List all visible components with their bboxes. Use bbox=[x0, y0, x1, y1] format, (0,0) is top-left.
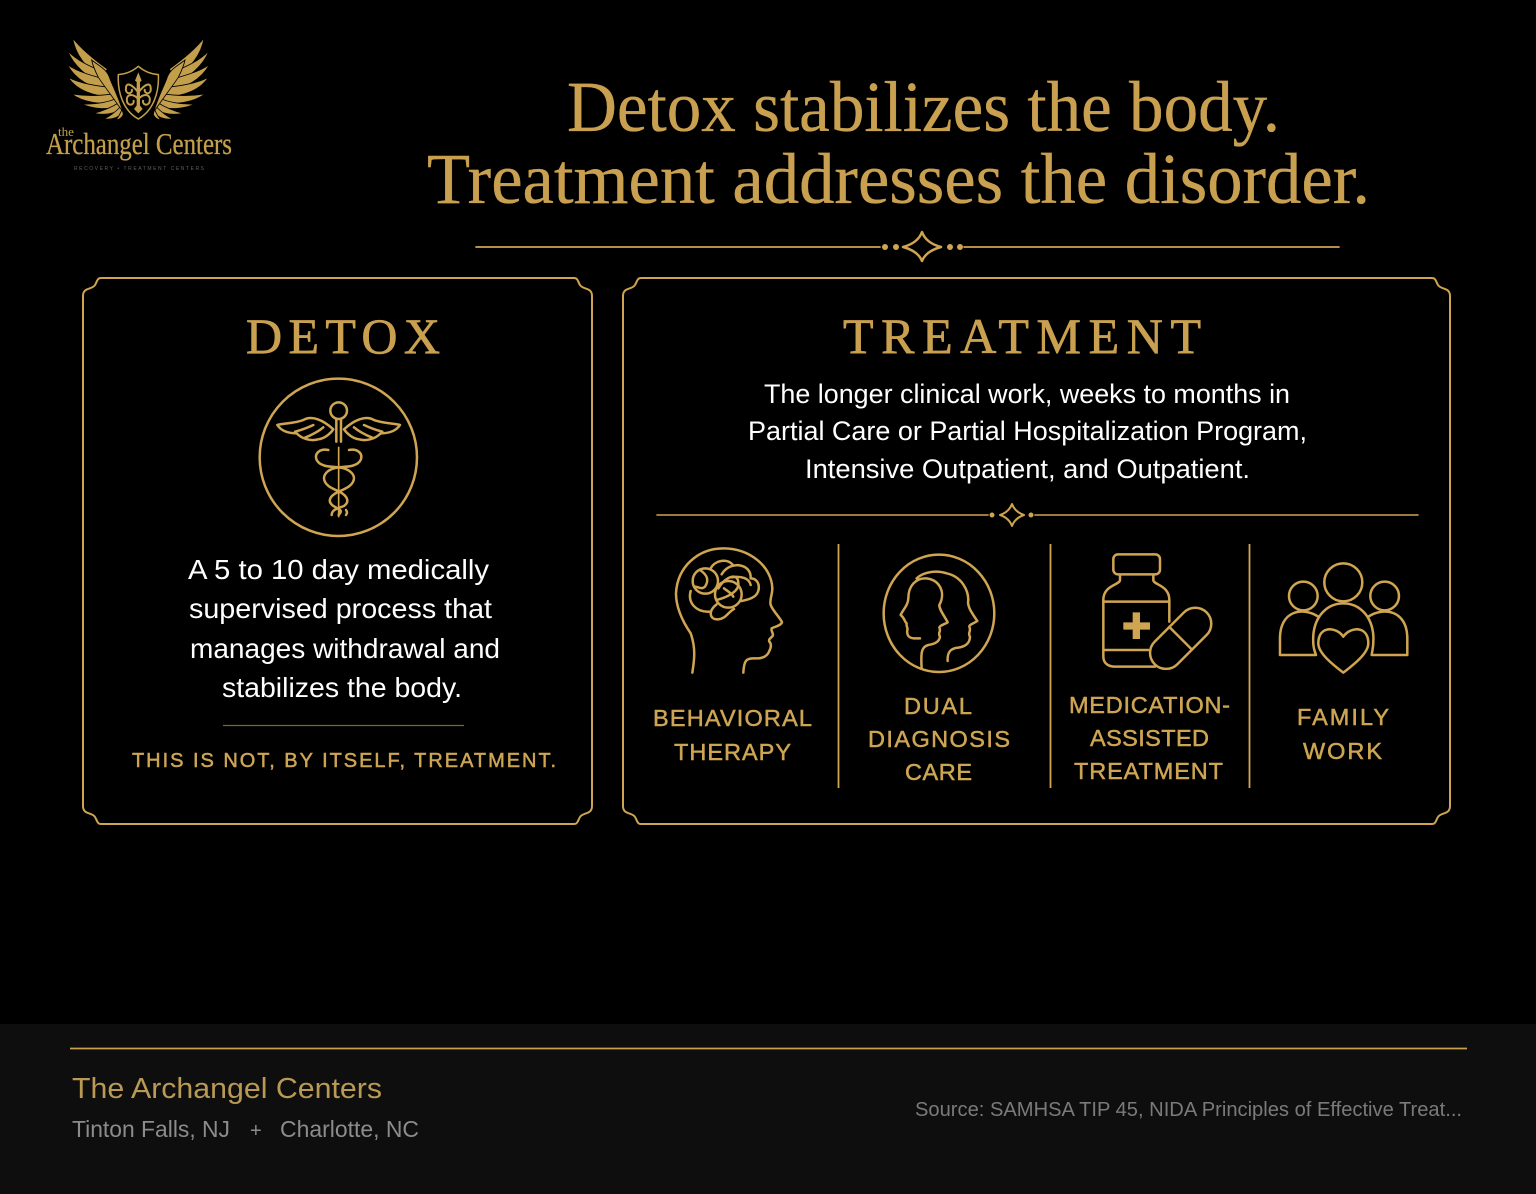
icon: caduceus bbox=[260, 379, 417, 536]
icon: medicine bottle and capsule bbox=[1103, 554, 1218, 676]
label: DIAGNOSIS bbox=[868, 726, 1010, 752]
footer locations: Tinton Falls, NJ bbox=[72, 1116, 230, 1142]
label bbox=[1069, 692, 1230, 784]
panel frame bbox=[623, 278, 1450, 824]
logo: The Archangel Centers: Archangel Centers bbox=[46, 126, 232, 161]
treatment description: Partial Care or Partial Hospitalization Program, bbox=[748, 416, 1307, 446]
panel: treatment bbox=[623, 278, 1450, 824]
item: dual diagnosis care bbox=[868, 555, 1010, 785]
label bbox=[868, 693, 1010, 785]
label: TREATMENT bbox=[1074, 758, 1223, 784]
footer source: Source: SAMHSA TIP 45, NIDA Principles of Effective Treat... bbox=[915, 1099, 1462, 1121]
title: Detox stabilizes the body. bbox=[567, 67, 1280, 147]
icon: winged shield bbox=[67, 38, 209, 120]
title: Treatment addresses the disorder. bbox=[427, 139, 1370, 219]
label: BEHAVIORAL bbox=[653, 705, 812, 731]
panel: detox bbox=[83, 278, 592, 824]
label: ASSISTED bbox=[1090, 725, 1209, 751]
label: WORK bbox=[1303, 738, 1382, 764]
left wing bbox=[67, 38, 123, 120]
detox description: stabilizes the body. bbox=[222, 672, 462, 703]
label: MEDICATION- bbox=[1069, 692, 1230, 718]
detox description: supervised process that bbox=[189, 593, 492, 624]
detox description bbox=[188, 554, 500, 703]
icon: head with tangled brain bbox=[676, 548, 782, 673]
heading: treatment: TREATMENT bbox=[843, 308, 1201, 364]
label bbox=[1297, 704, 1389, 764]
icon: family with heart bbox=[1280, 563, 1407, 673]
label bbox=[653, 705, 812, 765]
footer locations: + bbox=[250, 1120, 262, 1142]
treatment description bbox=[748, 379, 1307, 484]
icon: two profiles in a circle bbox=[884, 555, 994, 672]
label: DUAL bbox=[904, 693, 972, 719]
logo tagline: RECOVERY • TREATMENT CENTERS bbox=[74, 166, 205, 172]
treatment description: Intensive Outpatient, and Outpatient. bbox=[805, 454, 1250, 484]
item: family work bbox=[1280, 563, 1407, 764]
logo: The Archangel Centers bbox=[46, 38, 232, 172]
title ornament divider bbox=[476, 232, 1339, 261]
treatment description: The longer clinical work, weeks to months in bbox=[764, 379, 1290, 409]
footer locations: Charlotte, NC bbox=[280, 1116, 419, 1142]
item: behavioral therapy bbox=[653, 548, 812, 765]
logo wordmark: the bbox=[58, 124, 74, 139]
item: medication-assisted treatment bbox=[1069, 554, 1230, 784]
detox description: A 5 to 10 day medically bbox=[188, 554, 489, 585]
right wing bbox=[153, 38, 209, 120]
label: FAMILY bbox=[1297, 704, 1389, 730]
panel frame bbox=[83, 278, 592, 824]
shield bbox=[118, 66, 158, 119]
treatment ornament divider bbox=[657, 504, 1418, 526]
heading: detox: DETOX bbox=[246, 308, 440, 364]
detox callout: THIS IS NOT, BY ITSELF, TREATMENT. bbox=[132, 750, 556, 772]
title bbox=[427, 67, 1370, 219]
label: CARE bbox=[905, 759, 972, 785]
label: THERAPY bbox=[674, 739, 791, 765]
footer bbox=[0, 1024, 1536, 1194]
footer organization name: The Archangel Centers bbox=[72, 1073, 382, 1105]
footer locations bbox=[72, 1116, 419, 1142]
detox description: manages withdrawal and bbox=[190, 633, 500, 664]
